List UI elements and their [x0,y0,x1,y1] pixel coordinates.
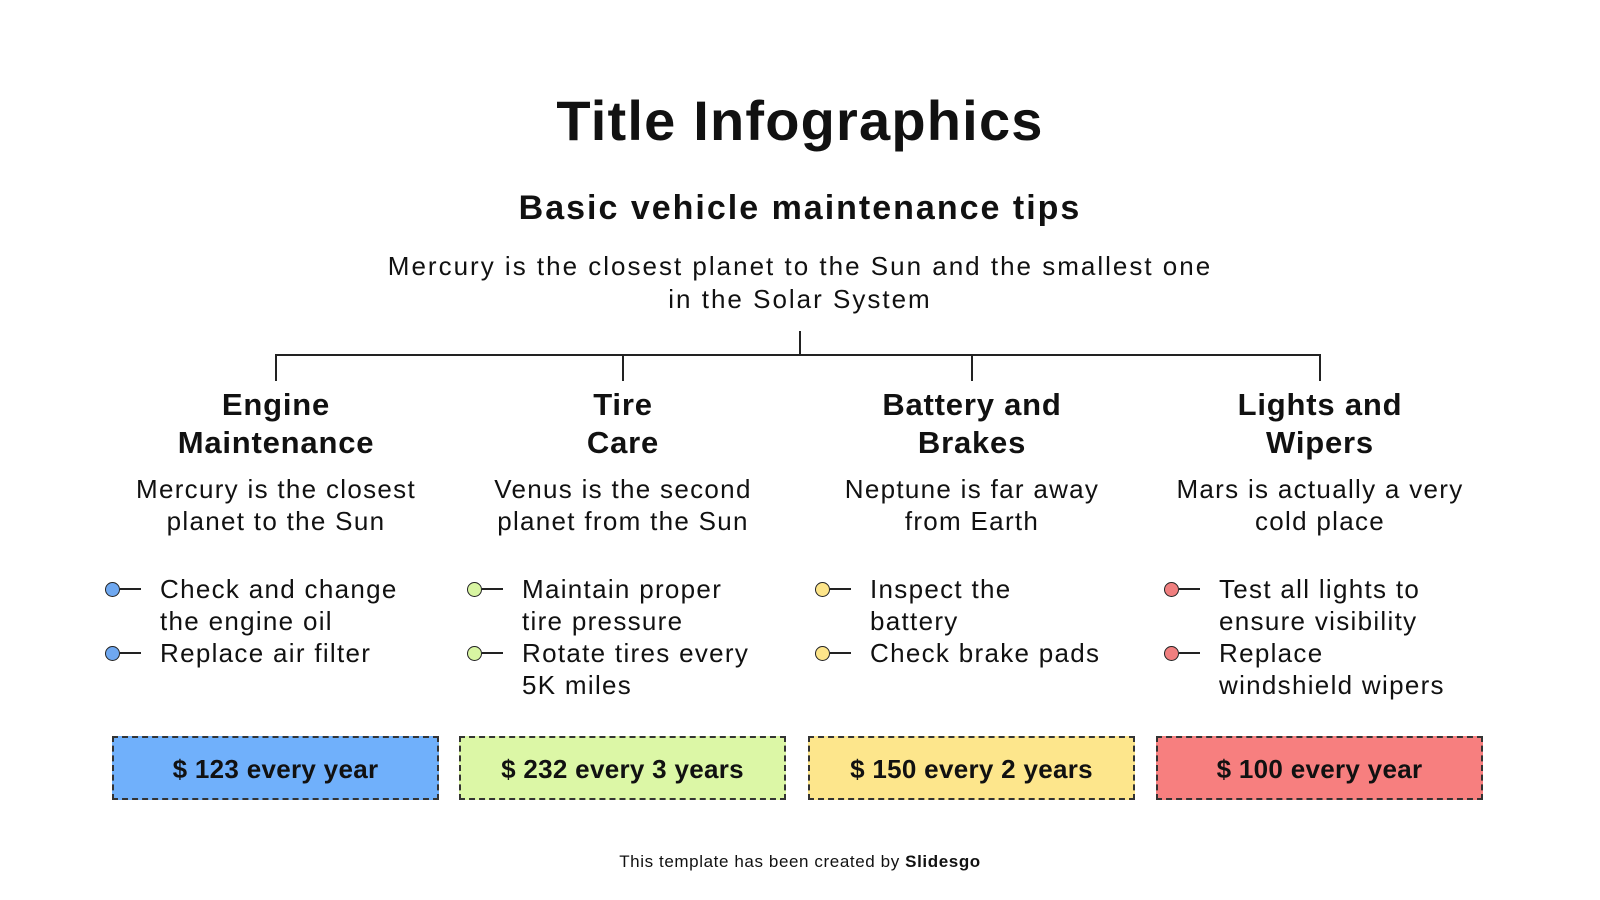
bullets [815,574,1100,668]
bullets: Rotate tires every [522,638,749,668]
heading [587,387,659,460]
bullets: 5K miles [522,670,632,700]
panel: battery [808,387,1135,800]
price box [808,736,1135,800]
bullets [1164,574,1445,700]
heading: Care [587,425,659,460]
heading: Tire [593,387,653,422]
bullets: windshield wipers [1219,670,1445,700]
panel: engine [105,387,439,800]
description: planet from the Sun [497,506,749,536]
bullets: Replace air filter [160,638,371,668]
price box [1156,736,1483,800]
intro text [388,251,1212,314]
heading [882,387,1062,460]
description: Mercury is the closest [136,474,416,504]
description [845,474,1099,536]
bullets: Maintain proper [522,574,722,604]
bullets: battery [870,606,959,636]
description: Mars is actually a very [1176,474,1464,504]
description [494,474,752,536]
description: Neptune is far away [845,474,1099,504]
bullets: Test all lights to [1219,574,1420,604]
bullets: the engine oil [160,606,333,636]
tree connector [275,331,1321,381]
price box: $ 232 every 3 years [501,754,744,784]
heading: Engine [222,387,330,422]
footer: This template has been created by Slidesgo [619,852,981,871]
bullets: Replace [1219,638,1324,668]
panel: lights [1156,387,1483,800]
heading: Wipers [1266,425,1374,460]
title: Title Infographics [556,89,1044,152]
bullets: tire pressure [522,606,683,636]
heading: Battery and [882,387,1062,422]
price box [459,736,786,800]
heading [178,387,374,460]
bullets: Inspect the [870,574,1012,604]
intro text: in the Solar System [668,284,932,314]
bullets: Check and change [160,574,398,604]
price box: $ 123 every year [173,754,378,784]
bullets [105,574,398,668]
price box: $ 150 every 2 years [850,754,1093,784]
description [1176,474,1464,536]
bullets: Check brake pads [870,638,1100,668]
price box [112,736,439,800]
heading: Maintenance [178,425,374,460]
heading: Lights and [1238,387,1402,422]
heading [1238,387,1402,460]
description: from Earth [905,506,1039,536]
heading: Brakes [918,425,1026,460]
intro text: Mercury is the closest planet to the Sun and the smallest one [388,251,1212,281]
description [136,474,416,536]
price box: $ 100 every year [1217,754,1422,784]
bullets [467,574,749,700]
subtitle: Basic vehicle maintenance tips [519,189,1081,227]
description: planet to the Sun [167,506,385,536]
description: cold place [1255,506,1385,536]
panel: tire [459,387,786,800]
description: Venus is the second [494,474,752,504]
bullets: ensure visibility [1219,606,1417,636]
